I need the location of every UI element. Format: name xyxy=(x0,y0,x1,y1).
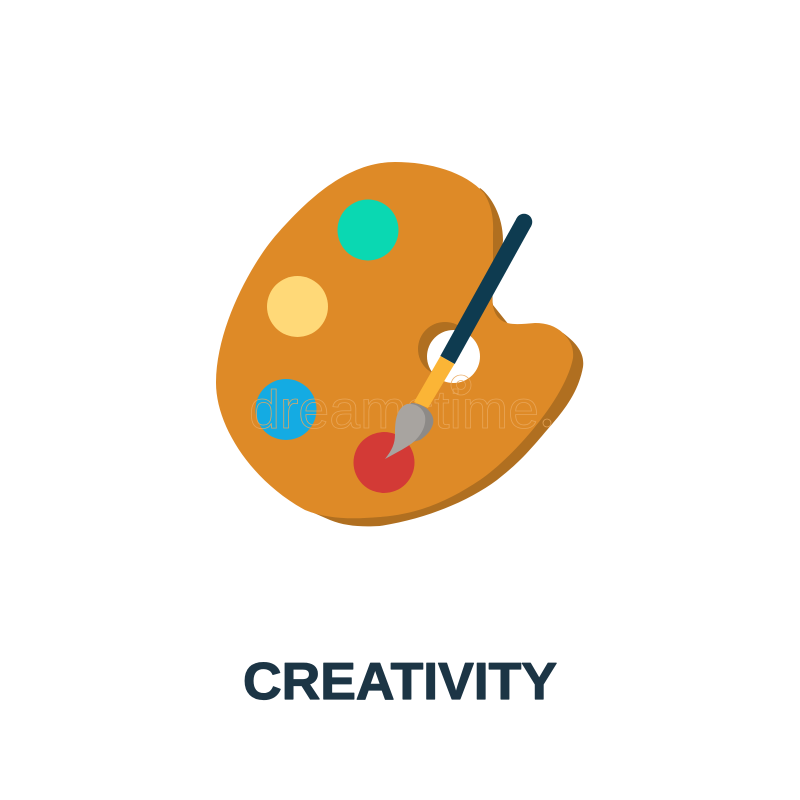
palette body xyxy=(216,162,573,518)
palette thumb hole xyxy=(418,322,480,383)
paintbrush xyxy=(385,214,532,459)
palette shadow edge xyxy=(300,188,583,526)
brush bristles shadow xyxy=(405,403,433,444)
paint: teal xyxy=(338,200,398,260)
icon: paint palette xyxy=(216,162,583,526)
paint: red xyxy=(354,432,414,493)
paint: yellow xyxy=(267,276,328,337)
watermark: dreamstime xyxy=(249,380,539,440)
brush ferrule xyxy=(414,356,454,408)
title: CREATIVITY xyxy=(243,653,557,711)
brush handle xyxy=(448,214,532,360)
brush bristles xyxy=(385,404,425,459)
paint: blue xyxy=(256,379,316,440)
